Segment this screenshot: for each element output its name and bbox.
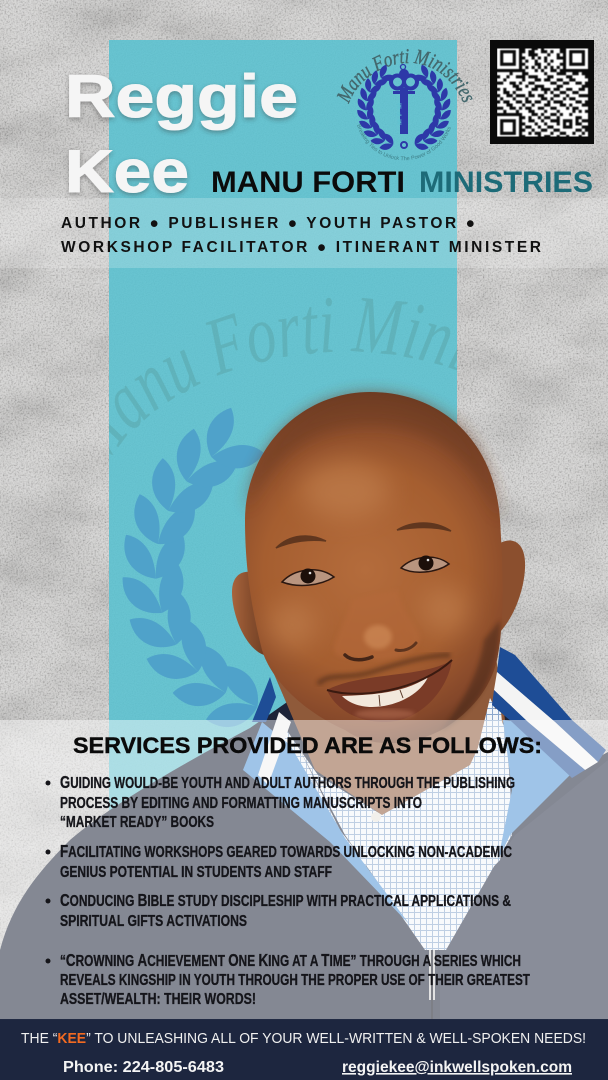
- icon: QR code: [490, 40, 594, 144]
- service: Bible study: SPIRITUAL GIFTS ACTIVATIONS: [60, 913, 247, 930]
- panel: translucent title band: [0, 198, 608, 268]
- service: publishing: [60, 772, 515, 831]
- left collar lining: [243, 722, 410, 925]
- panel: teal column: [109, 40, 457, 900]
- heading: services: SERVICES PROVIDED ARE AS FOLLOWS:: [73, 733, 542, 758]
- logo: Manu Forti Ministries key and wreath: [336, 49, 472, 160]
- list bullets: [46, 780, 50, 964]
- left ear: [232, 572, 264, 655]
- right collar lining: [498, 720, 570, 860]
- service: Bible study: CONDUCING BIBLE STUDY DISCIPLESHIP WITH PRACTICAL APPLICATIONS &: [60, 890, 511, 910]
- right shirt collar: [446, 698, 512, 900]
- right ear: [497, 541, 525, 635]
- figure: portrait of Reggie Kee: [0, 392, 608, 1080]
- watermark script: Manu Forti Ministries: [109, 298, 457, 455]
- panel: services translucent overlay: [0, 720, 608, 1020]
- service: workshops: [60, 841, 512, 881]
- heading: name: Reggie: [65, 63, 298, 130]
- jacket body: [0, 690, 608, 1080]
- right eyebrow: [397, 523, 451, 531]
- left collar navy stripe: [252, 677, 276, 722]
- heading: name: Kee: [65, 138, 189, 205]
- logo tagline: Breaking Ties to Unlock The Power of Good Works: [357, 124, 451, 160]
- right eye: [401, 556, 449, 572]
- left collar white stripe: [258, 712, 291, 785]
- heading: organization name: MANU FORTI: [211, 166, 405, 199]
- service: workshops: GENIUS POTENTIAL IN STUDENTS AND STAFF: [60, 864, 332, 881]
- logo key: [391, 64, 417, 148]
- panel: footer: [0, 1019, 608, 1080]
- left eyebrow: [276, 536, 326, 548]
- zip tape: [431, 950, 433, 1020]
- service: crowning achievement: [60, 950, 530, 1008]
- service: crowning achievement: “CROWNING ACHIEVEMENT ONE KING AT A TIME” THROUGH A SERIES WHICH: [60, 950, 521, 970]
- text block: roles: AUTHOR ● PUBLISHER ● YOUTH PASTOR ●: [61, 215, 475, 232]
- footer email: reggiekee@inkwellspoken.com: [342, 1059, 572, 1076]
- zipper: [429, 950, 435, 1000]
- text block: roles: [61, 215, 541, 256]
- head: [245, 392, 503, 743]
- right collar outer navy stripe: [497, 647, 606, 762]
- logo script name: Manu Forti Ministries: [336, 49, 472, 104]
- list: services provided: [46, 772, 530, 1008]
- jaw shadow: [440, 620, 500, 732]
- service: crowning achievement: ASSET/WEALTH: THEIR WORDS!: [60, 991, 256, 1008]
- watermark wreath: [121, 406, 267, 735]
- moustache: [318, 655, 450, 684]
- heading: organization name: MINISTRIES: [419, 166, 593, 199]
- service: Bible study: [60, 890, 511, 930]
- scalp shading: [246, 392, 500, 520]
- right collar white stripe: [494, 672, 598, 770]
- right collar inner navy stripe: [492, 690, 585, 778]
- footer phone: Phone: 224-805-6483: [63, 1059, 224, 1076]
- mouth: [327, 660, 452, 722]
- heading: organization name: [211, 166, 593, 199]
- service: publishing: “MARKET READY” BOOKS: [60, 814, 214, 831]
- shirt front: [300, 700, 512, 950]
- heading: name: [65, 63, 298, 205]
- watermark: large Manu Forti logo: [109, 298, 457, 727]
- left eye: [282, 568, 334, 585]
- logo key: MFM: [397, 103, 403, 125]
- logo wreath: [357, 64, 451, 152]
- shirt button: [371, 812, 381, 822]
- text block: roles: WORKSHOP FACILITATOR ● ITINERANT MINISTER: [61, 239, 541, 256]
- neck: [268, 650, 505, 815]
- jacket side shading: [440, 760, 608, 1020]
- left shirt collar: [268, 720, 372, 872]
- service: publishing: PROCESS BY EDITING AND FORMATTING MANUSCRIPTS INTO: [60, 795, 422, 812]
- forehead and cheek highlights: [268, 462, 469, 649]
- footer tagline: THE “KEE” TO UNLEASHING ALL OF YOUR WELL-WRITTEN & WELL-SPOKEN NEEDS!: [21, 1030, 586, 1047]
- nose: [334, 590, 420, 660]
